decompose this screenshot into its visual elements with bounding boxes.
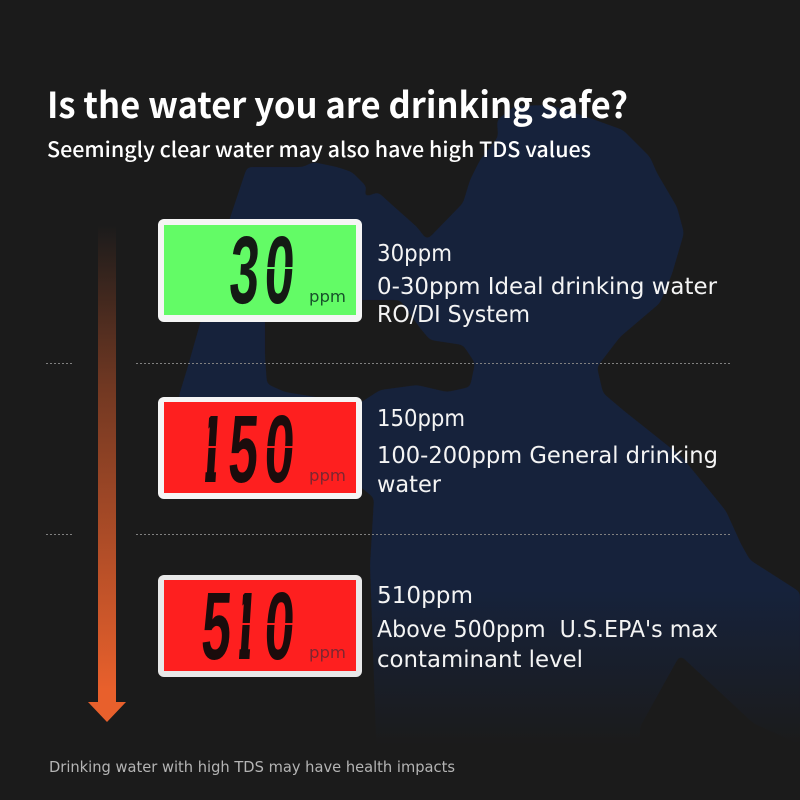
LCD digits 510 <box>202 592 293 660</box>
divider 2 <box>46 534 730 536</box>
text: 510ppm description <box>377 583 718 673</box>
LCD digits 30 <box>227 218 298 324</box>
text: 150ppm description: water <box>377 472 442 498</box>
text: 30ppm description <box>377 241 718 328</box>
ppm unit: ppm <box>309 466 346 485</box>
arrow: increasing TDS <box>88 225 126 722</box>
LCD digits 150: 0 <box>262 397 298 503</box>
text: 150ppm description: 100-200ppm General drinking <box>377 443 718 469</box>
panel: 510 ppm LCD reading <box>158 574 362 680</box>
ppm unit: ppm <box>309 643 346 662</box>
text: 150ppm description: 150ppm <box>377 406 465 432</box>
text: 30ppm description: 30ppm <box>377 241 452 267</box>
text: 510ppm description: 510ppm <box>377 583 473 609</box>
LCD digits 150: 5 <box>226 397 262 503</box>
LCD digits 30: 0 <box>262 218 298 324</box>
LCD digits 510: 5 <box>199 574 235 680</box>
LCD digits 150 <box>205 415 293 483</box>
text: 30ppm description: RO/DI System <box>377 302 530 328</box>
text: 510ppm description: contaminant level <box>377 647 583 673</box>
LCD digits 510: 1 <box>227 574 263 680</box>
text: 30ppm description: 0-30ppm Ideal drinking water <box>377 274 718 300</box>
LCD digits 150: 1 <box>193 397 229 503</box>
LCD digits 510: 0 <box>262 574 298 680</box>
panel: 30 ppm LCD reading <box>158 218 362 324</box>
ppm unit: ppm <box>309 287 346 306</box>
panel: 150 ppm LCD reading <box>158 397 362 503</box>
footnote: Drinking water with high TDS may have health impacts <box>49 758 455 776</box>
LCD digits 30: 3 <box>227 218 263 324</box>
text: 510ppm description: Above 500ppm U.S.EPA's max <box>377 617 718 643</box>
title: Is the water you are drinking safe? <box>47 77 628 129</box>
divider 1 <box>46 362 730 364</box>
text: 150ppm description <box>377 406 718 498</box>
subtitle: Seemingly clear water may also have high TDS values <box>47 134 591 164</box>
